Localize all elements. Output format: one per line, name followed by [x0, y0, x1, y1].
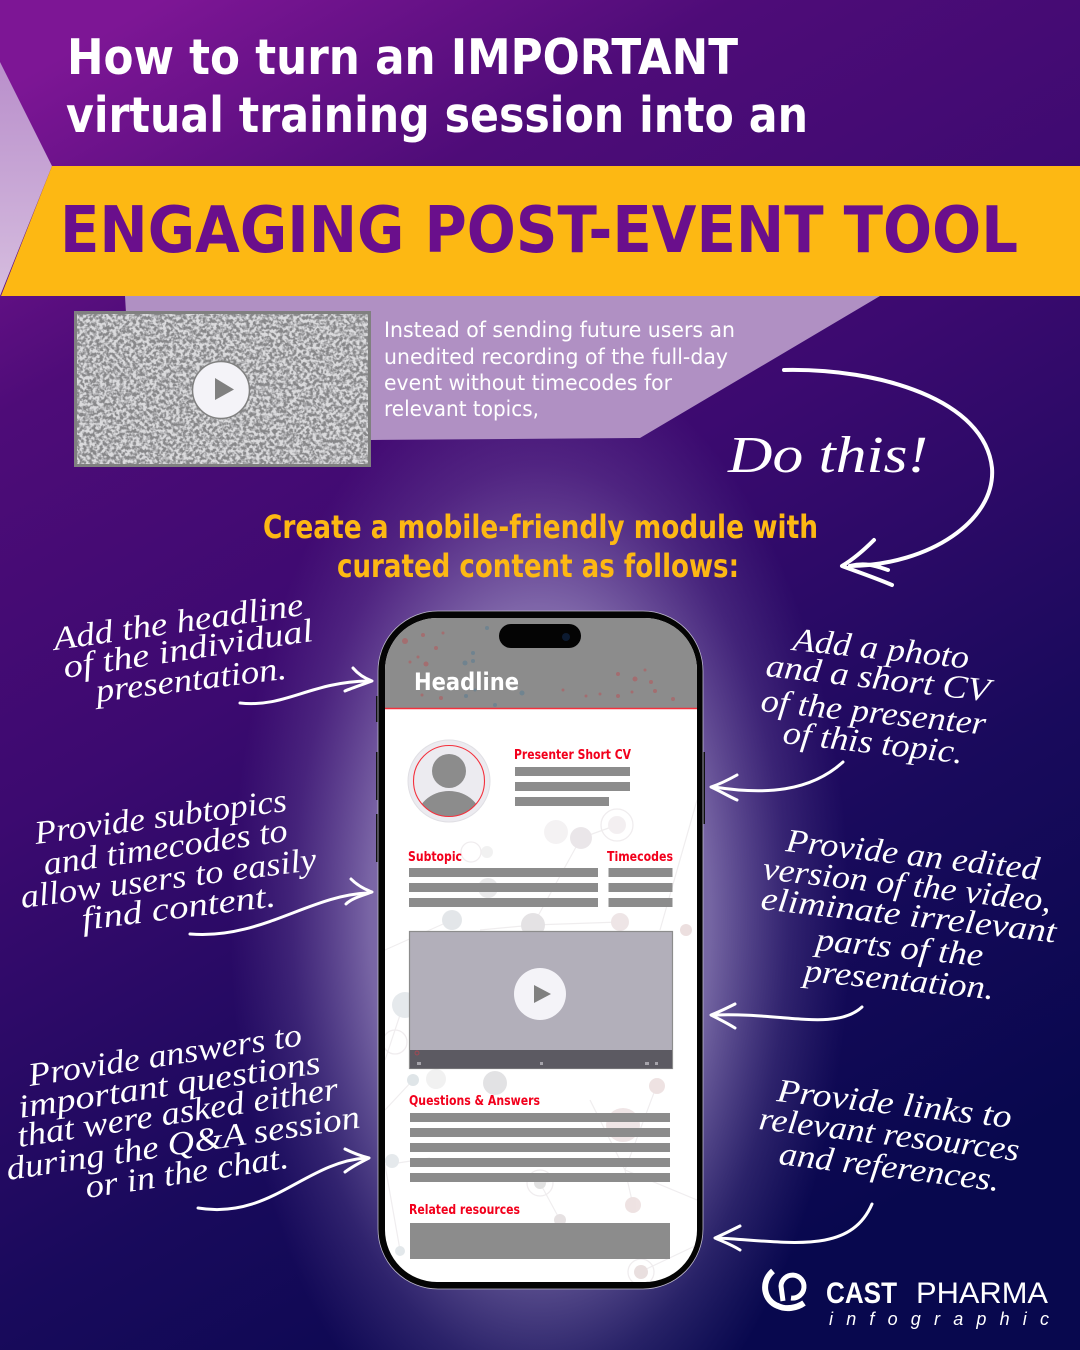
video thumbnail with static: [74, 311, 371, 467]
icon: logo mark: [765, 1271, 804, 1308]
intro text block: event without timecodes for: [384, 371, 672, 395]
annotation: subtopics: and timecodes to: [41, 813, 290, 883]
annotation: edited video: eliminate irrelevant: [759, 881, 1059, 951]
arrow: subtopics: [190, 879, 372, 935]
banner: engaging post-event tool: [1, 166, 1080, 296]
annotation: photo and cv: of this topic.: [781, 715, 965, 771]
annotation: photo and cv: and a short CV: [764, 648, 996, 710]
annotation: links and resources: Provide links to: [774, 1073, 1014, 1136]
questions and answers: Questions & Answers: [409, 1094, 540, 1109]
left decorative triangle: [0, 62, 52, 296]
phone mockup: [376, 611, 705, 1289]
headline label: Headline: [414, 668, 519, 696]
annotation: subtopics: find content.: [80, 878, 278, 938]
related resources: [409, 1203, 670, 1259]
logo: cast pharma infographic: PHARMA: [916, 1277, 1048, 1310]
annotation: edited video: version of the video,: [761, 851, 1053, 920]
annotation: headline: presentation.: [91, 651, 289, 710]
arrow: links and resources: [715, 1204, 872, 1250]
annotation: headline: [49, 587, 315, 710]
title: How to turn an IMPORTANT: [67, 29, 739, 86]
title: virtual training session into an: [66, 87, 808, 144]
heading: create a mobile-friendly module: [263, 508, 818, 585]
header band: [383, 618, 697, 708]
callout: do this: Do this!: [727, 427, 928, 484]
annotation: links and resources: and references.: [777, 1136, 1002, 1199]
header network dots: [383, 632, 675, 701]
annotation: links and resources: relevant resources: [757, 1101, 1021, 1169]
presenter short cv: [514, 748, 631, 806]
arrow: do this to module: [784, 370, 992, 585]
annotation: photo and cv: [759, 622, 996, 771]
intro text block: unedited recording of the full-day: [384, 345, 728, 369]
annotation: questions and answers: Provide answers to: [25, 1018, 304, 1094]
annotation: questions and answers: that were asked either: [15, 1071, 341, 1155]
network background pattern: [383, 800, 697, 1285]
intro text block: relevant topics,: [384, 397, 539, 421]
timecodes list: Timecodes: [607, 850, 673, 865]
timecodes list: [607, 850, 673, 907]
annotation: edited video: parts of the: [812, 922, 985, 974]
annotation: questions and answers: important questions: [16, 1045, 323, 1126]
arrow: headline: [240, 668, 372, 704]
icon: play button: [514, 968, 566, 1020]
annotation: subtopics: [18, 783, 319, 938]
annotation: photo and cv: of the presenter: [759, 683, 988, 743]
annotation: questions and answers: during the Q&A session: [4, 1100, 362, 1188]
annotation: questions and answers: [4, 1018, 362, 1206]
icon: play button: [192, 362, 250, 418]
phone dynamic island: [499, 624, 581, 648]
phone body: [378, 611, 703, 1289]
heading: create a mobile-friendly module: curated content as follows:: [337, 547, 739, 585]
phone side buttons: [376, 696, 705, 862]
annotation: edited video: presentation.: [800, 953, 996, 1007]
edited video player: [410, 932, 672, 1068]
title: [66, 29, 808, 144]
related resources: Related resources: [409, 1203, 520, 1218]
annotation: photo and cv: Add a photo: [789, 622, 971, 676]
annotation: edited video: [759, 823, 1059, 1007]
intro text block: Instead of sending future users an: [384, 318, 735, 342]
logo: cast pharma infographic: CAST: [826, 1277, 897, 1310]
annotation: questions and answers: or in the chat.: [83, 1140, 291, 1206]
phone screen: [383, 618, 697, 1285]
annotation: headline: of the individual: [61, 613, 315, 686]
annotation: headline: Add the headline: [49, 587, 306, 658]
arrow: questions and answers: [198, 1149, 369, 1210]
subtopics list: [408, 850, 598, 907]
presenter avatar: [408, 740, 490, 822]
intro text block: [384, 318, 735, 421]
logo: cast pharma infographic: infographic: [829, 1309, 1049, 1329]
annotation: links and resources: [757, 1073, 1021, 1199]
annotation: subtopics: Provide subtopics: [31, 783, 289, 852]
logo: cast pharma infographic: [765, 1271, 1049, 1329]
presenter short cv: Presenter Short CV: [514, 748, 631, 763]
questions and answers: [409, 1094, 670, 1182]
annotation: edited video: Provide an edited: [783, 823, 1042, 888]
subtopics list: Subtopic: [408, 850, 462, 865]
heading: create a mobile-friendly module: Create a mobile-friendly module with: [263, 508, 818, 546]
annotation: subtopics: allow users to easily: [18, 842, 319, 916]
arrow: edited video: [711, 1004, 862, 1028]
panel: intro text: [125, 296, 880, 467]
arrow: photo and cv: [711, 762, 843, 800]
